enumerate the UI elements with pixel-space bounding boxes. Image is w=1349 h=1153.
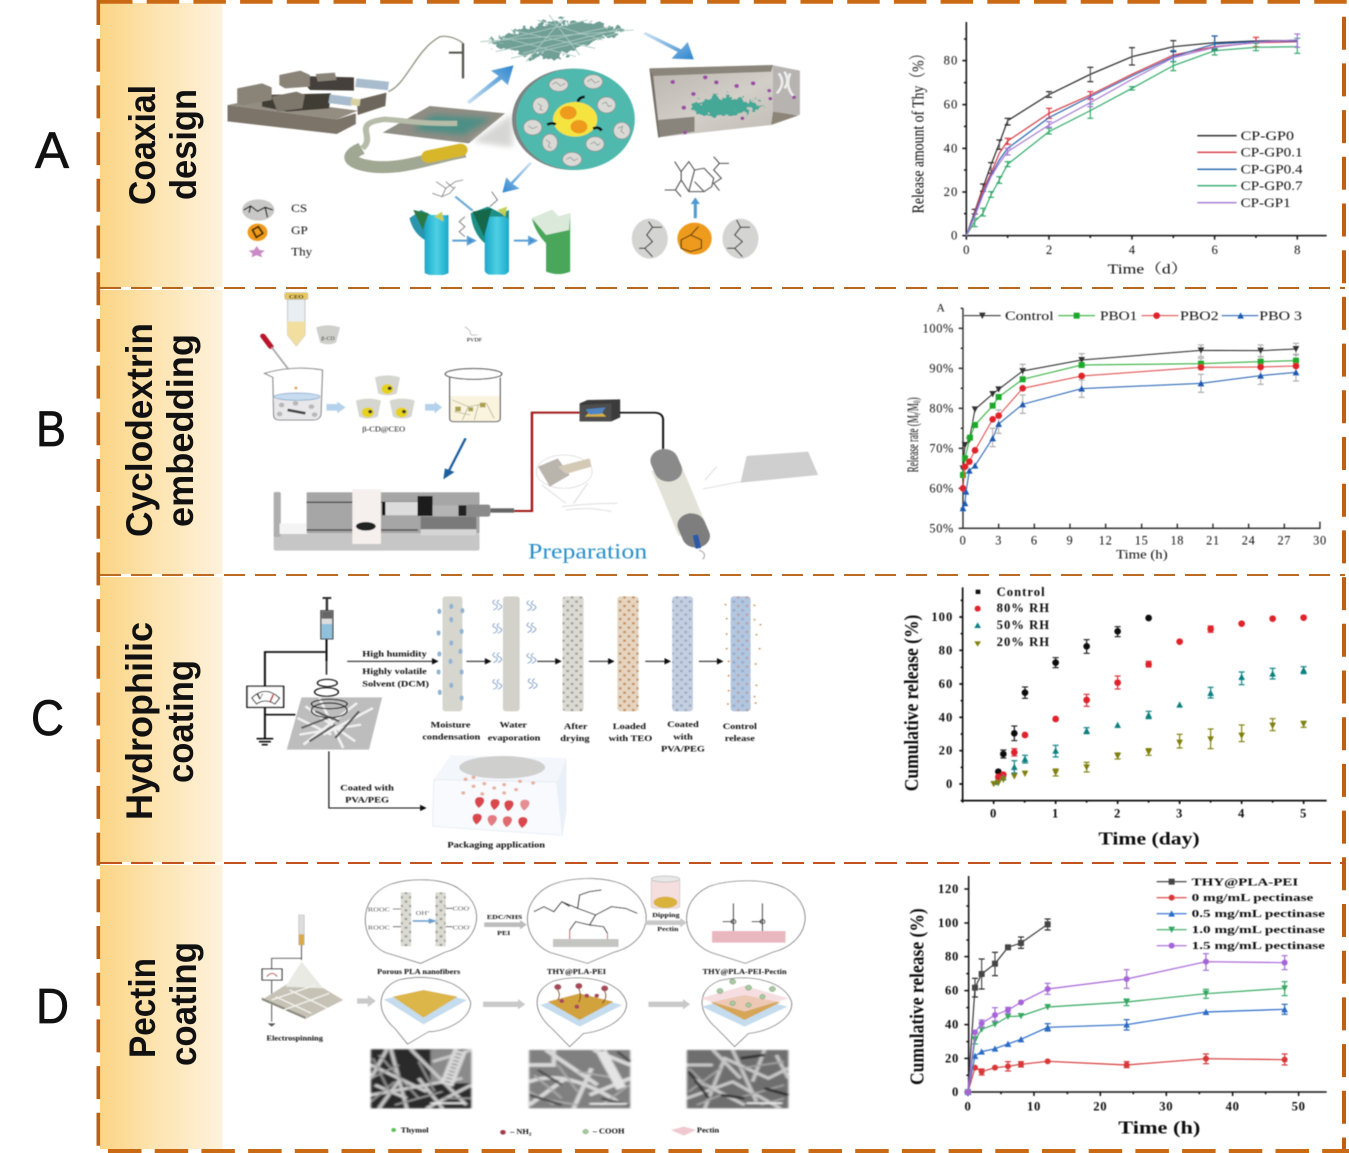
icon: spinning solution beaker bbox=[445, 369, 502, 422]
chart legend: THY@PLA-PEI bbox=[1192, 877, 1298, 889]
icon: electrospinning setup bbox=[262, 915, 343, 1027]
image: SEM THY@PLA-PEI-Pectin bbox=[687, 1050, 788, 1108]
chart series: PBO3 bbox=[963, 372, 1296, 508]
chart axis labels: 20 bbox=[939, 744, 953, 758]
chart series: 20% RH bbox=[994, 719, 1304, 784]
legend: symbols: 2 bbox=[529, 1133, 532, 1137]
chart axis labels: t bbox=[913, 413, 923, 415]
panel: A coaxial design bbox=[35, 15, 1327, 277]
chart axis labels: 80% bbox=[929, 401, 954, 415]
heading: Coaxial design: Coaxial bbox=[122, 85, 163, 205]
arrow: complex to solution bbox=[425, 402, 442, 413]
text: fibre stage labels: evaporation bbox=[488, 734, 541, 743]
icon: dried porous fibre bbox=[563, 596, 584, 711]
chart series: 50% RH bbox=[996, 667, 1304, 782]
row letter B: B bbox=[36, 401, 66, 457]
text: fibre stage labels: Control bbox=[723, 723, 757, 732]
chart axis labels: 30 bbox=[1159, 1099, 1173, 1113]
legend: symbols: Pectin bbox=[697, 1126, 720, 1134]
chart legend: CP-GP0.7 bbox=[1241, 179, 1303, 193]
text: fibre stage labels: drying bbox=[560, 735, 590, 744]
chart axis labels: 80 bbox=[945, 950, 959, 964]
chart axis labels: 2 bbox=[1046, 243, 1052, 257]
chart: Thy release bbox=[908, 22, 1327, 277]
chart axis labels: 90% bbox=[929, 361, 954, 375]
text: fibre stage labels: condensation bbox=[422, 733, 481, 742]
callout: PEI mat bbox=[537, 978, 626, 1047]
icon: thymol release arrow bbox=[455, 197, 473, 211]
text: fibre stage labels: Coated bbox=[667, 721, 699, 730]
text: PVDF: PVDF bbox=[467, 338, 482, 343]
text: fibre stage labels: Loaded bbox=[613, 723, 647, 732]
chart axis labels: 0 bbox=[946, 777, 953, 791]
chart legend bbox=[1197, 129, 1303, 210]
callout: PLA mat bbox=[381, 978, 470, 1044]
chart axis labels: 40 bbox=[945, 1018, 959, 1032]
panel: C hydrophilic coating bbox=[31, 585, 1327, 850]
chart error bars bbox=[993, 343, 1296, 447]
chart axis labels: 21 bbox=[1206, 533, 1220, 547]
chart axis labels: 100 bbox=[938, 916, 959, 930]
chart axis labels: 4 bbox=[1129, 243, 1136, 257]
heading: Hydrophilic coating: Hydrophilic bbox=[119, 622, 160, 820]
image: SEM porous PLA bbox=[371, 1049, 471, 1108]
chart series: Control bbox=[998, 618, 1149, 772]
chart series: CP-GP1 bbox=[966, 34, 1297, 236]
chart series: 0 mg/mL bbox=[968, 1054, 1285, 1092]
row letter D: D bbox=[36, 980, 69, 1034]
callout: porous PLA fibres: - bbox=[469, 924, 471, 928]
text: fibre stage labels bbox=[422, 721, 757, 754]
chart axis labels: 60 bbox=[945, 984, 959, 998]
text: fibre stage labels: After bbox=[564, 723, 588, 732]
row letter A: A bbox=[35, 122, 69, 179]
chart axis labels: 6 bbox=[1211, 243, 1218, 257]
icon: deposited mat bbox=[383, 106, 513, 147]
arrow: up to GP molecule bbox=[691, 197, 700, 218]
chart series: 1.0 mg/mL bbox=[968, 982, 1285, 1092]
chart: release rate bbox=[905, 303, 1327, 561]
callout: porous PLA fibres: ROOC bbox=[368, 923, 390, 931]
text: Packaging application: Packaging application bbox=[447, 841, 546, 850]
chart legend: PBO1 bbox=[1100, 309, 1137, 323]
heading: Coaxial design: design bbox=[163, 89, 204, 200]
chart axis labels bbox=[905, 303, 1327, 561]
chart axis labels bbox=[908, 47, 1300, 277]
icon: CEO tube: CEO bbox=[289, 294, 304, 300]
icon: small molecule bbox=[432, 180, 463, 197]
chart axes bbox=[959, 308, 1320, 528]
callout: porous PLA fibres: OH bbox=[416, 909, 427, 917]
text: process conditions: Solvent (DCM) bbox=[362, 679, 429, 689]
arrow: EDC/NHS PEI: PEI bbox=[497, 929, 511, 937]
chart axis labels: Time (h) bbox=[1116, 547, 1168, 561]
chart legend: 80% RH bbox=[997, 601, 1050, 615]
icon: power supply bbox=[580, 399, 620, 421]
chart series: Control bbox=[963, 349, 1296, 468]
heading: Hydrophilic coating bbox=[119, 622, 201, 820]
chart axes bbox=[964, 876, 1327, 1096]
chart axis labels: 1 bbox=[1052, 806, 1059, 820]
callout: PEI structure bbox=[527, 879, 646, 963]
chart axes bbox=[962, 22, 1327, 240]
chart axis labels: 40 bbox=[944, 141, 958, 155]
text: fibre stage labels: with bbox=[673, 733, 693, 742]
chart axis labels: 15 bbox=[1135, 533, 1148, 547]
chart axis labels: Cumulative release (%) bbox=[901, 615, 923, 791]
chart axis labels: 20 bbox=[944, 185, 958, 199]
chart axis labels: 0 bbox=[990, 806, 997, 820]
icon: voltmeter bbox=[247, 686, 284, 707]
chart axis labels bbox=[901, 610, 1307, 850]
chart legend: 1.0 mg/mL pectinase bbox=[1192, 924, 1325, 936]
callout: porous PLA fibres: COO bbox=[452, 904, 469, 912]
arrow: to PLA mat bbox=[357, 995, 376, 1007]
arrow: nozzle to fibres bbox=[467, 65, 514, 104]
chart legend: 0 mg/mL pectinase bbox=[1192, 892, 1313, 904]
text: process conditions: Highly volatile bbox=[362, 668, 427, 677]
chart axis labels: 60% bbox=[929, 481, 954, 495]
arrow: to pectin bbox=[645, 918, 687, 927]
arrow: EDC/NHS PEI: EDC/NHS bbox=[487, 913, 522, 921]
chart axis labels: 80 bbox=[944, 54, 958, 68]
text: fibre stage labels: release bbox=[725, 735, 755, 744]
chart legend: PBO2 bbox=[1180, 309, 1219, 323]
text: fibre stage labels: PVA/PEG bbox=[661, 745, 706, 754]
heading: Cyclodextrin embedding: Cyclodextrin bbox=[119, 323, 160, 537]
callout: porous PLA fibres bbox=[365, 880, 477, 963]
chart axis labels: Time (day) bbox=[1098, 829, 1200, 850]
chart axis labels: 18 bbox=[1170, 533, 1184, 547]
chart: cumulative release humidity bbox=[901, 585, 1327, 850]
chart axis labels: 40 bbox=[1226, 1099, 1240, 1113]
icon: beta-CD@CEO complexes bbox=[356, 375, 415, 419]
chart axis labels: 3 bbox=[995, 533, 1002, 547]
illustration: coaxial fibre preparation bbox=[228, 15, 800, 275]
arrow: beaker to complex bbox=[327, 402, 346, 413]
text: Coated with PVA/PEG: PVA/PEG bbox=[345, 796, 390, 805]
text: Dipping Pectin: Dipping bbox=[652, 911, 680, 919]
icon: rotating collector bbox=[664, 461, 705, 559]
icon: voltmeter: V bbox=[256, 693, 264, 702]
chart legend bbox=[974, 585, 1050, 649]
heading: Pectin coating: coating bbox=[163, 942, 204, 1066]
panel: B cyclodextrin embedding bbox=[36, 293, 1327, 564]
text: stage labels: THY@PLA-PEI-Pectin bbox=[703, 968, 787, 976]
chart axis labels: 50 bbox=[1292, 1099, 1306, 1113]
icon: swollen fibre tubes bbox=[409, 192, 570, 275]
icon: GP molecule structure bbox=[665, 157, 729, 197]
chart axis labels: /M bbox=[905, 403, 922, 414]
legend: CS GP Thy bbox=[242, 199, 313, 258]
icon: CEO tube bbox=[285, 293, 308, 346]
illustration: humidity electrospinning bbox=[247, 596, 761, 850]
icon: red high-voltage wire bbox=[514, 413, 580, 511]
chart series: THY@PLA-PEI bbox=[968, 919, 1048, 1092]
callout: porous PLA fibres: + bbox=[427, 909, 430, 914]
chart axis labels: 0 bbox=[913, 400, 923, 403]
text: fibre stage labels: Moisture bbox=[431, 721, 470, 730]
icon: packaging box with strawberries bbox=[433, 755, 567, 835]
chart legend: 20% RH bbox=[997, 635, 1050, 649]
chart legend: CP-GP0 bbox=[1241, 129, 1294, 143]
arrow: mat to packaging bbox=[329, 751, 425, 810]
arrows: fibre stage flow bbox=[347, 659, 722, 664]
chart series: PBO1 bbox=[963, 361, 1296, 475]
chart axis labels: 9 bbox=[1067, 533, 1073, 547]
chart axis labels: 10 bbox=[1027, 1099, 1041, 1113]
chart legend: PBO 3 bbox=[1259, 309, 1302, 323]
icon: circuit bbox=[257, 652, 325, 745]
chart axis labels: 4 bbox=[1238, 806, 1245, 820]
chart legend bbox=[1157, 877, 1325, 952]
heading: Hydrophilic coating: coating bbox=[160, 660, 201, 783]
icon: beaker with stirrer bbox=[265, 368, 323, 420]
arrow: fibre to film bbox=[643, 32, 694, 59]
arrow: solution to syringe pump bbox=[443, 438, 466, 479]
icon: beta-CD cup: β-CD bbox=[321, 336, 335, 342]
icon: film block with fibres bbox=[649, 65, 800, 137]
chart axis labels: 100% bbox=[923, 321, 954, 335]
arrow: tube stage 1 to 2 bbox=[452, 237, 474, 244]
chart series: CP-GP0.4 bbox=[966, 36, 1297, 236]
chart axis labels: 8 bbox=[1294, 243, 1300, 257]
chart axis labels: 3 bbox=[1176, 806, 1183, 820]
chart axis labels: Time (h) bbox=[1118, 1117, 1200, 1138]
chart axis labels: Release amount of Thy（%） bbox=[908, 47, 927, 213]
chart axis labels: 0 bbox=[952, 1085, 959, 1099]
icon: fibre close-up bbox=[536, 455, 617, 512]
icon: beta-CD cup bbox=[316, 325, 340, 344]
chart axis labels: 60 bbox=[944, 98, 958, 112]
text: fibre stage labels: with TEO bbox=[609, 735, 652, 744]
arrow: PEI to pectin bbox=[648, 999, 690, 1009]
chart axis labels: 20 bbox=[945, 1051, 959, 1065]
callout: porous PLA fibres: ROOC bbox=[368, 905, 390, 913]
icon: moisture condensation fibre bbox=[437, 596, 464, 711]
chart axis labels: 0 bbox=[964, 1099, 971, 1113]
chart axis labels: 100 bbox=[931, 610, 953, 624]
chart axis labels: Release rate (M bbox=[905, 375, 922, 472]
chart axis labels: 40 bbox=[939, 710, 953, 724]
chart axis labels: Time（d） bbox=[1108, 261, 1188, 277]
heading: Cyclodextrin embedding: embedding bbox=[160, 334, 201, 527]
panel: D pectin coating bbox=[36, 876, 1327, 1138]
arrow: PLA to PEI bbox=[483, 999, 525, 1009]
icon: water evaporation fibre bbox=[493, 596, 537, 711]
chart legend bbox=[964, 309, 1302, 323]
callout: pectin mat bbox=[700, 978, 792, 1047]
icon: needle wire bbox=[388, 36, 463, 92]
text: stage labels bbox=[377, 968, 787, 976]
text: stage labels: Porous PLA nanofibers bbox=[377, 968, 460, 976]
text: process conditions bbox=[362, 650, 429, 689]
chart series: PBO2 bbox=[963, 366, 1296, 488]
chart legend: 0.5 mg/mL pectinase bbox=[1192, 908, 1325, 920]
icon: whipping jet bbox=[311, 661, 347, 718]
icon: TEO loaded fibre bbox=[617, 596, 638, 711]
icon: collector mat bbox=[287, 697, 382, 750]
chart series: CP-GP0 bbox=[966, 36, 1297, 236]
row letter C: C bbox=[31, 690, 64, 746]
illustration: electrospinning preparation bbox=[263, 293, 818, 564]
chart axis labels: A bbox=[937, 303, 946, 315]
chart axis labels: ) bbox=[905, 397, 922, 400]
heading: Pectin coating bbox=[122, 942, 204, 1066]
chart axis labels: Cumulative release (%) bbox=[906, 908, 928, 1085]
chart series: CP-GP0.7 bbox=[966, 38, 1297, 236]
icon: coaxial nozzle bbox=[351, 119, 465, 167]
text: beta-CD@CEO: β-CD@CEO bbox=[362, 425, 406, 433]
chart axis labels: 5 bbox=[1300, 806, 1307, 820]
chart: cumulative release pectinase bbox=[906, 876, 1327, 1138]
icon: black wire bbox=[619, 413, 663, 453]
chart axis labels: 20 bbox=[1093, 1099, 1107, 1113]
chart axis labels: 120 bbox=[938, 882, 959, 896]
chart axis labels: 0 bbox=[951, 229, 958, 243]
chart legend: Control bbox=[1005, 309, 1054, 323]
callout: porous PLA fibres: - bbox=[469, 905, 471, 910]
icon: fibre mat bbox=[480, 15, 633, 62]
text: Dipping Pectin bbox=[652, 911, 680, 933]
chart axis labels bbox=[906, 882, 1306, 1138]
chart axis labels: 0 bbox=[960, 533, 966, 547]
text: Dipping Pectin: Pectin bbox=[657, 925, 678, 933]
heading: Coaxial design bbox=[122, 85, 204, 205]
chart series: 1.5 mg/mL bbox=[968, 954, 1285, 1092]
chart series: CP-GP0.1 bbox=[966, 37, 1297, 236]
legend: CS GP Thy: Thy bbox=[291, 245, 313, 258]
chart legend: 50% RH bbox=[997, 618, 1050, 632]
legend: CS GP Thy: CS bbox=[291, 202, 307, 215]
icon: syringe pump bbox=[274, 489, 514, 551]
chart axis labels: 6 bbox=[1031, 533, 1038, 547]
illustration: pectin coated nanofibres bbox=[262, 876, 805, 1137]
icon: control release fibre bbox=[724, 596, 761, 711]
text: Electrospinning: Electrospinning bbox=[267, 1034, 323, 1042]
chart legend: Control bbox=[997, 585, 1046, 599]
arrow: tube stage 2 to 3 bbox=[514, 237, 536, 244]
icon: pipette bbox=[263, 336, 271, 347]
icon: needle bbox=[449, 43, 463, 78]
arrow: EDC/NHS PEI bbox=[484, 913, 527, 937]
chart axis labels: 12 bbox=[1099, 533, 1112, 547]
text: stage labels: THY@PLA-PEI bbox=[547, 968, 606, 976]
chart legend: CP-GP0.4 bbox=[1241, 163, 1303, 177]
icon: pipette stem bbox=[272, 347, 292, 373]
icon: GP-CS interaction bbox=[632, 219, 758, 259]
chart legend: CP-GP1 bbox=[1241, 196, 1291, 210]
chart series: 0.5 mg/mL bbox=[968, 1004, 1285, 1092]
icon: coaxial 3D printer bbox=[228, 71, 388, 134]
text: fibre stage labels: Water bbox=[500, 721, 528, 730]
chart axis labels: 0 bbox=[963, 243, 969, 257]
heading: Pectin coating: Pectin bbox=[122, 958, 163, 1058]
image: SEM THY@PLA-PEI bbox=[529, 1050, 630, 1108]
chart axis labels: 70% bbox=[929, 441, 954, 455]
chart axis labels: 24 bbox=[1242, 533, 1255, 547]
legend: symbols bbox=[391, 1126, 720, 1137]
chart axis labels: 80 bbox=[939, 644, 953, 658]
text: Preparation: Preparation bbox=[528, 540, 647, 564]
text: PVDF bbox=[465, 327, 482, 343]
callout: pectin structure bbox=[687, 881, 805, 963]
chart axis labels: 2 bbox=[1114, 806, 1121, 820]
icon: fibre cross-section bbox=[512, 69, 635, 170]
icon: syringe bbox=[321, 598, 333, 661]
text: process conditions: High humidity bbox=[362, 650, 427, 659]
heading: Cyclodextrin embedding bbox=[119, 323, 201, 537]
text: Coated with PVA/PEG: Coated with bbox=[340, 784, 395, 793]
legend: symbols: Thymol bbox=[401, 1126, 429, 1134]
icon: coated fibre bbox=[672, 596, 693, 711]
chart axis labels: 30 bbox=[1313, 533, 1327, 547]
chart series: 80% RH bbox=[998, 618, 1304, 777]
legend: symbols: – NH bbox=[510, 1128, 529, 1136]
chart axis labels: 27 bbox=[1277, 533, 1291, 547]
legend: CS GP Thy: GP bbox=[291, 224, 308, 237]
chart axis labels: 60 bbox=[939, 677, 953, 691]
chart axis labels: 50% bbox=[929, 521, 954, 535]
chart legend: 1.5 mg/mL pectinase bbox=[1192, 940, 1325, 952]
icon: fibre membrane bbox=[703, 452, 818, 489]
legend: symbols: – COOH bbox=[592, 1127, 624, 1135]
text: Coated with PVA/PEG bbox=[340, 784, 395, 805]
arrow: cross-section to fibre wall bbox=[502, 162, 532, 193]
chart legend: CP-GP0.1 bbox=[1241, 146, 1303, 160]
icon: pectin beaker bbox=[651, 876, 680, 908]
chart axes bbox=[959, 587, 1327, 804]
callout: porous PLA fibres: COO bbox=[452, 923, 469, 931]
